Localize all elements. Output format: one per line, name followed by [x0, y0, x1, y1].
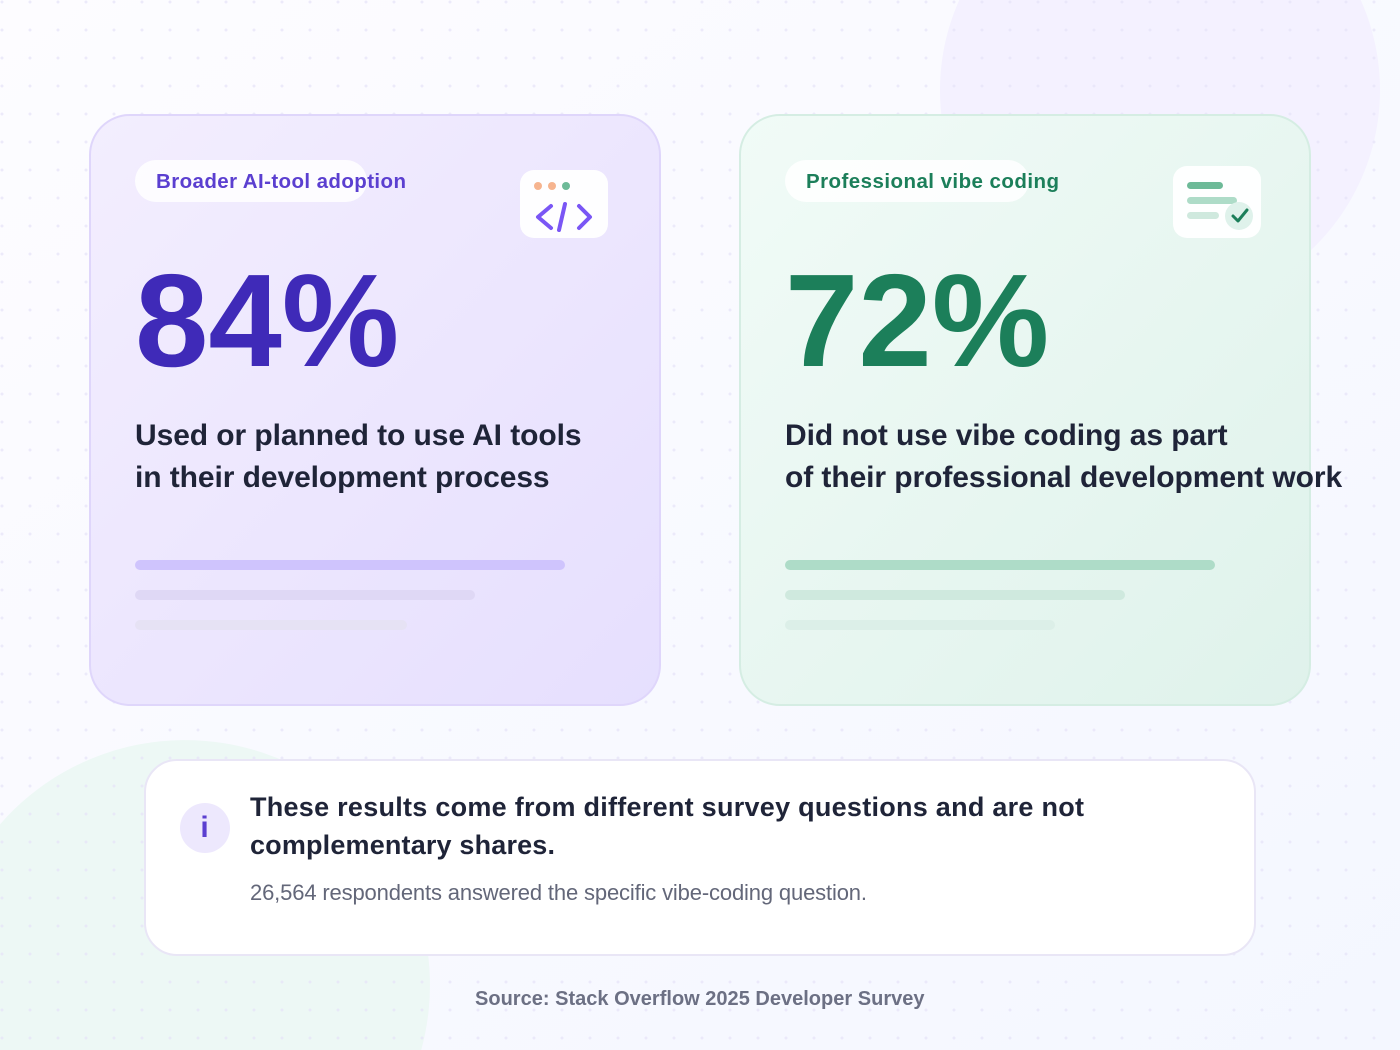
panel: survey note: [145, 760, 1255, 955]
description: AI tools: in their development process: [135, 461, 550, 494]
badge: professional vibe coding: Professional vibe coding: [806, 170, 1059, 193]
description: vibe coding: Did not use vibe coding as part: [785, 419, 1228, 452]
description: AI tools: Used or planned to use AI tools: [135, 419, 581, 452]
icon: info: i: [200, 811, 209, 844]
icon: info: [180, 803, 230, 853]
badge: broader AI-tool adoption: Broader AI-tool adoption: [156, 170, 406, 193]
badge: professional vibe coding: [785, 160, 1059, 202]
decorative text lines: [785, 560, 1215, 630]
icon: checklist: [1173, 166, 1261, 238]
panel: professional vibe coding: [740, 115, 1342, 705]
statistic: 72%: 72%: [785, 247, 1049, 394]
description: vibe coding: of their professional development work: [785, 461, 1342, 494]
statistic: 84%: 84%: [135, 247, 399, 394]
note heading: These results come from different survey questions and are not: [250, 792, 1084, 822]
panel: broader AI-tool adoption: [90, 115, 660, 705]
icon: code window: [520, 170, 608, 238]
decorative text lines: [135, 560, 565, 630]
note body: 26,564 respondents answered the specific vibe-coding question.: [250, 880, 867, 905]
note heading: complementary shares.: [250, 830, 555, 860]
badge: broader AI-tool adoption: [135, 160, 406, 202]
source: Source: Stack Overflow 2025 Developer Survey: [475, 988, 925, 1010]
